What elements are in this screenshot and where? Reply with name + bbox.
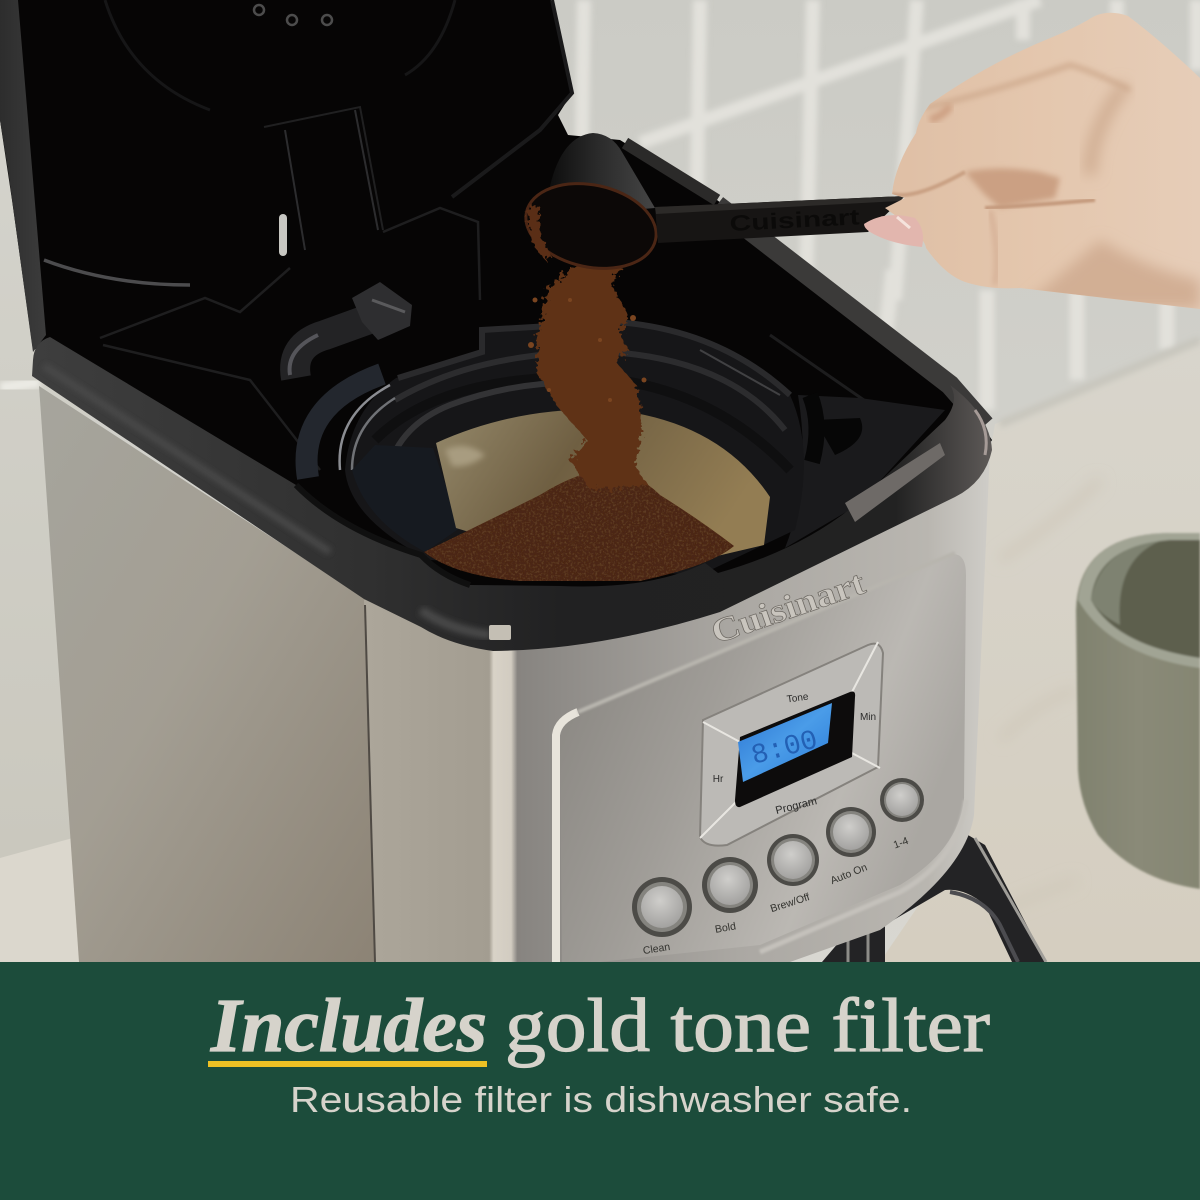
water tube xyxy=(290,282,412,378)
body seam xyxy=(365,605,375,962)
banner xyxy=(0,962,1200,1200)
control panel with display: 8:00 xyxy=(748,725,821,773)
control buttons: Auto On xyxy=(829,861,869,887)
control panel with display: Program xyxy=(774,795,818,817)
coffee maker: rim xyxy=(32,337,992,651)
control panel with display: Hr xyxy=(713,774,724,785)
control buttons: Clean xyxy=(642,941,671,957)
heading: Includes xyxy=(210,984,487,1068)
heading underline xyxy=(208,1061,487,1067)
coffee grounds pile xyxy=(424,470,734,581)
coffee maker: front panel xyxy=(364,450,990,962)
heading: gold tone filter xyxy=(505,984,990,1068)
gold tone filter xyxy=(436,409,770,560)
rim highlights xyxy=(44,366,986,640)
falling coffee grounds stream xyxy=(528,258,648,490)
subheading: Reusable filter is dishwasher safe. xyxy=(290,1079,912,1120)
background: countertop xyxy=(0,340,1200,962)
filter highlight xyxy=(445,446,485,466)
control buttons: Brew/Off xyxy=(769,891,811,915)
background: left wall xyxy=(0,120,90,860)
front inset panel xyxy=(560,554,966,962)
mug xyxy=(1076,533,1200,889)
control buttons: Bold xyxy=(714,920,737,936)
coffee maker: side panel xyxy=(39,386,375,962)
inset panel highlights xyxy=(556,553,966,962)
control panel with display xyxy=(700,642,883,846)
filter inner dark wall xyxy=(352,445,460,552)
control buttons: 1-4 xyxy=(892,835,910,851)
filter basket rings xyxy=(307,322,945,575)
hand xyxy=(864,13,1200,309)
coffee maker: open lid and reservoir xyxy=(0,0,992,610)
measuring scoop xyxy=(518,133,905,280)
heading xyxy=(210,984,990,1068)
control panel with display: Tone xyxy=(786,692,810,705)
brand logo: Cuisinart xyxy=(707,564,871,652)
measuring scoop: Cuisinart xyxy=(729,204,861,236)
carafe handle xyxy=(822,835,1046,962)
control buttons xyxy=(632,778,924,957)
control panel with display: Min xyxy=(860,712,876,723)
